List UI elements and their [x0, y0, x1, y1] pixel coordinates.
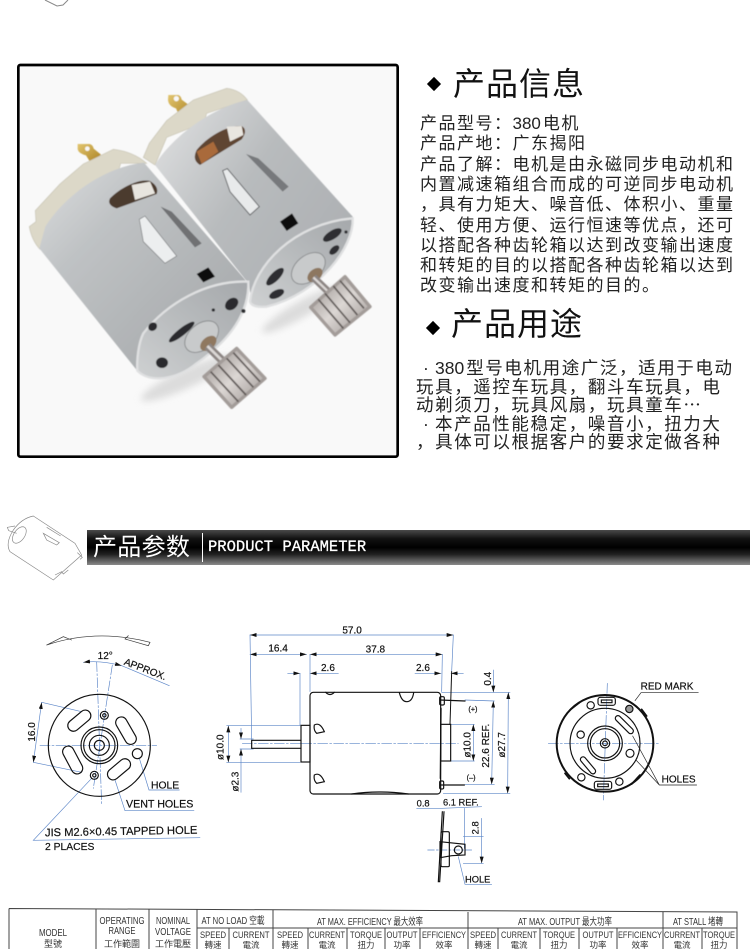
drawing: front view: JIS M2.6×0.45 TAPPED HOLE: [45, 825, 197, 839]
table: parameter header: [8, 908, 738, 949]
text block: product use: [416, 358, 734, 452]
drawing: front view: 12°: [98, 651, 113, 662]
table: parameter header: OUTPUT: [386, 929, 418, 940]
text block: product info: ，具有力矩大、噪音低、体积小、重量: [420, 195, 734, 214]
text block: product info: 以搭配各种齿轮箱以达到改变输出速度: [420, 236, 734, 255]
section banner: product parameter: [87, 530, 750, 565]
drawing: front view: 2 PLACES: [45, 842, 94, 853]
text block: product info: 产品产地：广东揭阳: [420, 134, 586, 153]
table: parameter header: OUTPUT: [582, 929, 614, 940]
soft shadows: [137, 281, 342, 408]
drawing: side view: 2.6: [416, 663, 430, 674]
table: parameter header: SPEED: [200, 929, 226, 940]
table: parameter header: AT NO LOAD 空載: [202, 914, 264, 927]
table: parameter header: CURRENT: [501, 929, 537, 940]
drawing: side view: HOLE: [465, 875, 490, 885]
text block: product use: ，具体可以根据客户的要求定做各种: [416, 432, 722, 452]
drawing: side view: 0.8: [417, 799, 430, 809]
table: parameter header: AT MAX. EFFICIENCY 最大效率: [317, 915, 423, 928]
drawing: side view: ø2.3: [230, 771, 241, 792]
table: parameter header: VOLTAGE: [155, 927, 191, 938]
text block: product use: 动剃须刀，玩具风扇，玩具童车⋯: [416, 395, 702, 415]
table: parameter header: TORQUE: [350, 929, 382, 940]
text block: product info: [420, 114, 734, 295]
drawing: front view: [27, 635, 200, 853]
drawing: side view: 37.8: [366, 644, 386, 655]
text block: product info: 产品型号：380电机: [420, 114, 580, 133]
drawing: side view: 0.4: [483, 671, 494, 686]
table: parameter header: TORQUE: [543, 929, 575, 940]
drawing: rear view: [548, 681, 699, 800]
drawing: side view: (+): [468, 705, 478, 714]
drawing: side view: ø27.7: [497, 732, 508, 758]
table: parameter header: AT MAX. OUTPUT 最大功率: [518, 915, 612, 928]
text block: product info: 产品了解：电机是由永磁同步电动机和: [420, 155, 734, 174]
table: parameter header: TORQUE: [703, 929, 735, 940]
heading: product use: [426, 306, 583, 342]
text block: product info: 内置减速箱组合而成的可逆同步电动机: [420, 175, 734, 194]
table: parameter header: CURRENT: [664, 929, 700, 940]
icon: diamond: [426, 321, 440, 335]
drawing: rear view: RED MARK: [641, 681, 694, 692]
heading: product info: [427, 66, 585, 102]
text block: product use: ·: [423, 358, 429, 378]
drawing: front view: APPROX.: [122, 657, 168, 683]
table: parameter header: CURRENT: [309, 929, 345, 940]
drawing: side view: (–): [467, 773, 476, 782]
drawing: side view: 6.1 REF.: [443, 798, 479, 808]
banner subtitle: PRODUCT PARAMETER: [208, 538, 366, 556]
table: parameter header: 工作電壓: [155, 938, 191, 949]
drawing: rear view: HOLES: [662, 775, 696, 786]
text block: product use: 380型号电机用途广泛，适用于电动: [435, 358, 734, 378]
drawing: side view: ø10.0: [216, 734, 227, 760]
drawing: side view: 2.6: [321, 663, 335, 674]
text block: product use: 玩具，遥控车玩具，翻斗车玩具，电: [416, 377, 722, 397]
drawing: side view: 16.4: [268, 644, 288, 655]
table: parameter header: EFFICIENCY: [422, 929, 467, 940]
drawing: side view: [216, 625, 510, 885]
icon: diamond: [427, 77, 441, 91]
drawing: side view: 2.8: [470, 821, 480, 834]
text block: product info: 改变输出速度和转矩的目的。: [420, 276, 660, 295]
table: parameter header: 工作範圍: [104, 938, 140, 949]
drawing: side view: 22.6 REF.: [481, 724, 492, 768]
table: parameter header: RANGE: [108, 926, 136, 937]
photo frame: [18, 65, 398, 457]
heading text: 产品信息: [453, 66, 585, 102]
table: parameter header: EFFICIENCY: [618, 929, 663, 940]
drawing: front view: 16.0: [27, 722, 38, 742]
text block: product info: 轻、使用方便、运行恒速等优点，还可: [420, 216, 734, 234]
front motor: [29, 144, 265, 407]
back motor: [143, 88, 370, 335]
table: parameter header: MODEL: [39, 928, 67, 939]
table: parameter header: NOMINAL: [156, 916, 190, 927]
heading text: 产品用途: [451, 306, 583, 342]
table: parameter header: AT STALL 堵轉: [673, 915, 723, 928]
icon: cropped motor outline at top edge: [44, 0, 68, 6]
text block: product use: ·: [423, 414, 429, 434]
banner divider: [202, 533, 203, 562]
text block: product info: 和转矩的目的以搭配各种齿轮箱以达到: [420, 256, 734, 275]
table: parameter header: 型號: [44, 938, 62, 949]
table: parameter header: SPEED: [277, 929, 303, 940]
drawing: side view: ø10.0: [462, 732, 473, 758]
table: parameter header: OPERATING: [100, 916, 145, 927]
banner title: 产品参数: [93, 534, 190, 561]
text block: product use: 本产品性能稳定，噪音小，扭力大: [435, 414, 722, 434]
table: parameter header: CURRENT: [232, 929, 270, 940]
icon: motor outline: [6, 516, 83, 580]
drawing: front view: VENT HOLES: [126, 799, 193, 811]
table: parameter header: SPEED: [470, 929, 496, 940]
panel: product photo: [17, 64, 399, 458]
drawing: front view: HOLE: [151, 780, 179, 791]
drawing: side view: 57.0: [342, 625, 362, 636]
